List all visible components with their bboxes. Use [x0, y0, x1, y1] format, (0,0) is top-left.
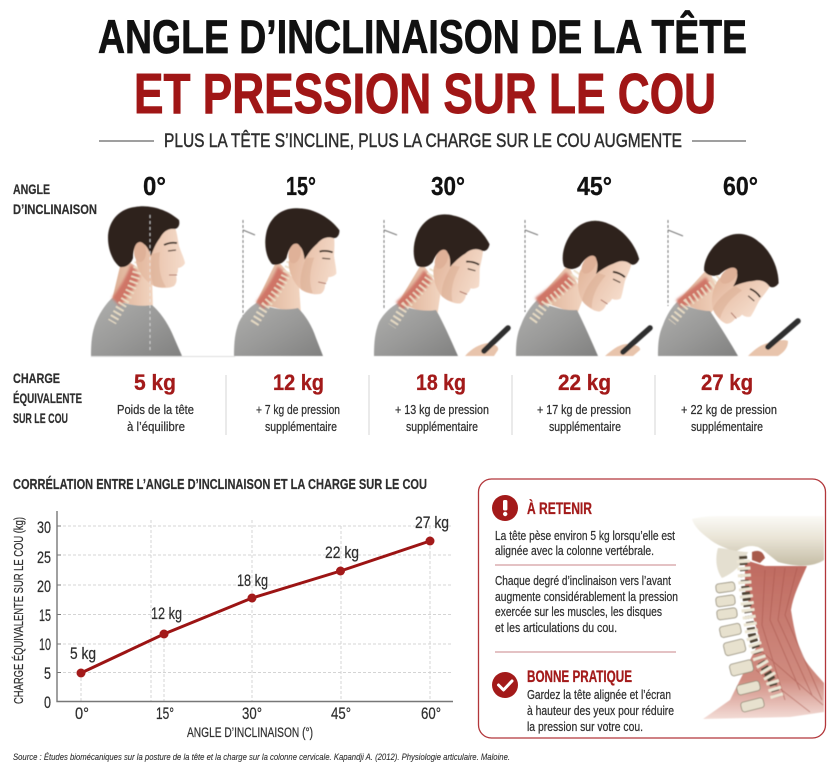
charge values	[134, 370, 753, 395]
subtitle: PLUS LA TÊTE S’INCLINE, PLUS LA CHARGE SUR LE COU AUGMENTE	[164, 130, 682, 152]
chart title: CORRÉLATION ENTRE L’ANGLE D’INCLINAISON ET LA CHARGE SUR LE COU	[13, 476, 427, 493]
charge descriptions: supplémentaire	[406, 420, 478, 434]
charge descriptions	[117, 375, 777, 435]
text: head weight: alignée avec la colonne vertébrale.	[495, 543, 654, 558]
line chart: 60°	[421, 704, 441, 723]
text: each degree: augmente considérablement la pression	[495, 589, 678, 604]
angle headings: 30°	[431, 171, 465, 201]
line chart: 20	[37, 577, 51, 596]
line chart: 15°	[156, 704, 174, 723]
charge descriptions: Poids de la tête	[117, 403, 194, 417]
angle headings: 60°	[723, 171, 758, 201]
angle headings: 15°	[286, 171, 316, 201]
icon: check mark	[492, 672, 518, 698]
charge descriptions: + 22 kg de pression	[681, 403, 777, 417]
line chart: 5 kg	[70, 644, 96, 663]
charge descriptions: supplémentaire	[549, 420, 621, 434]
line chart: 45°	[331, 704, 351, 723]
figure: 30 degrees	[374, 205, 508, 356]
line chart: 0	[44, 693, 51, 712]
line chart: 0°	[75, 704, 89, 723]
charge descriptions: + 17 kg de pression	[537, 403, 631, 417]
row label: charge: CHARGE	[13, 370, 60, 386]
figure: 15 degrees	[234, 202, 348, 356]
row label: charge: ÉQUIVALENTE	[13, 390, 82, 406]
angle headings	[143, 171, 758, 201]
charge descriptions: à l’équilibre	[127, 420, 185, 434]
panel: key takeaways	[478, 479, 826, 738]
charge descriptions: + 13 kg de pression	[395, 403, 489, 417]
line chart: CHARGE ÉQUIVALENTE SUR LE COU (kg)	[11, 517, 26, 704]
line chart: 10	[39, 635, 51, 654]
line chart: 15	[39, 606, 51, 625]
line chart	[11, 511, 453, 740]
line chart: 27 kg	[415, 513, 449, 532]
row label: angle: D’INCLINAISON	[13, 201, 97, 217]
icon: exclamation	[492, 495, 518, 521]
row label: angle: ANGLE	[13, 181, 50, 197]
text: head weight	[495, 528, 675, 558]
line chart: 30	[37, 518, 51, 537]
charge values: 22 kg	[558, 370, 611, 395]
figure: 45 degrees	[516, 209, 652, 356]
charge values: 27 kg	[701, 370, 753, 395]
charge values: 18 kg	[416, 370, 466, 395]
angle headings: 0°	[143, 171, 166, 201]
title	[98, 10, 747, 126]
row label: angle	[13, 181, 97, 217]
line chart: ANGLE D’INCLINAISON (°)	[187, 725, 313, 740]
row label: charge: SUR LE COU	[13, 410, 68, 426]
charge descriptions: supplémentaire	[691, 420, 763, 434]
text: each degree: et les articulations du cou.	[495, 620, 617, 635]
charge descriptions: supplémentaire	[265, 420, 337, 434]
text: each degree: Chaque degré d’inclinaison vers l’avant	[495, 573, 671, 588]
line chart: 12 kg	[151, 604, 182, 623]
line chart: 22 kg	[325, 543, 359, 562]
text: good practice: la pression sur votre cou.	[527, 719, 643, 734]
figure: 0 degrees	[91, 206, 235, 356]
text: good practice: Gardez la tête alignée et l’écran	[527, 687, 671, 702]
illustration: neck anatomy	[692, 516, 824, 719]
heading: à retenir: À RETENIR	[527, 499, 592, 518]
source note: Source : Études biomécaniques sur la posture de la tête et la charge sur la colonne cervicale. Kapandji A. (2012). Physiologie articulaire. Maloine.	[13, 752, 510, 763]
line chart: 25	[37, 548, 51, 567]
line chart: 18 kg	[237, 571, 268, 590]
line chart: 5	[44, 664, 51, 683]
figure: 60 degrees	[658, 220, 798, 356]
charge values: 5 kg	[134, 370, 176, 395]
text: good practice: à hauteur des yeux pour réduire	[527, 703, 674, 718]
heading: bonne pratique: BONNE PRATIQUE	[527, 667, 632, 686]
text: good practice	[527, 687, 674, 734]
charge values: 12 kg	[273, 370, 324, 395]
angle headings: 45°	[577, 171, 612, 201]
row label: charge	[13, 370, 82, 426]
text: each degree: exercée sur les muscles, les disques	[495, 604, 662, 619]
text: each degree	[495, 573, 678, 635]
charge descriptions: + 7 kg de pression	[256, 403, 340, 417]
line chart: 30°	[242, 704, 262, 723]
text: head weight: La tête pèse environ 5 kg lorsqu’elle est	[495, 528, 675, 543]
